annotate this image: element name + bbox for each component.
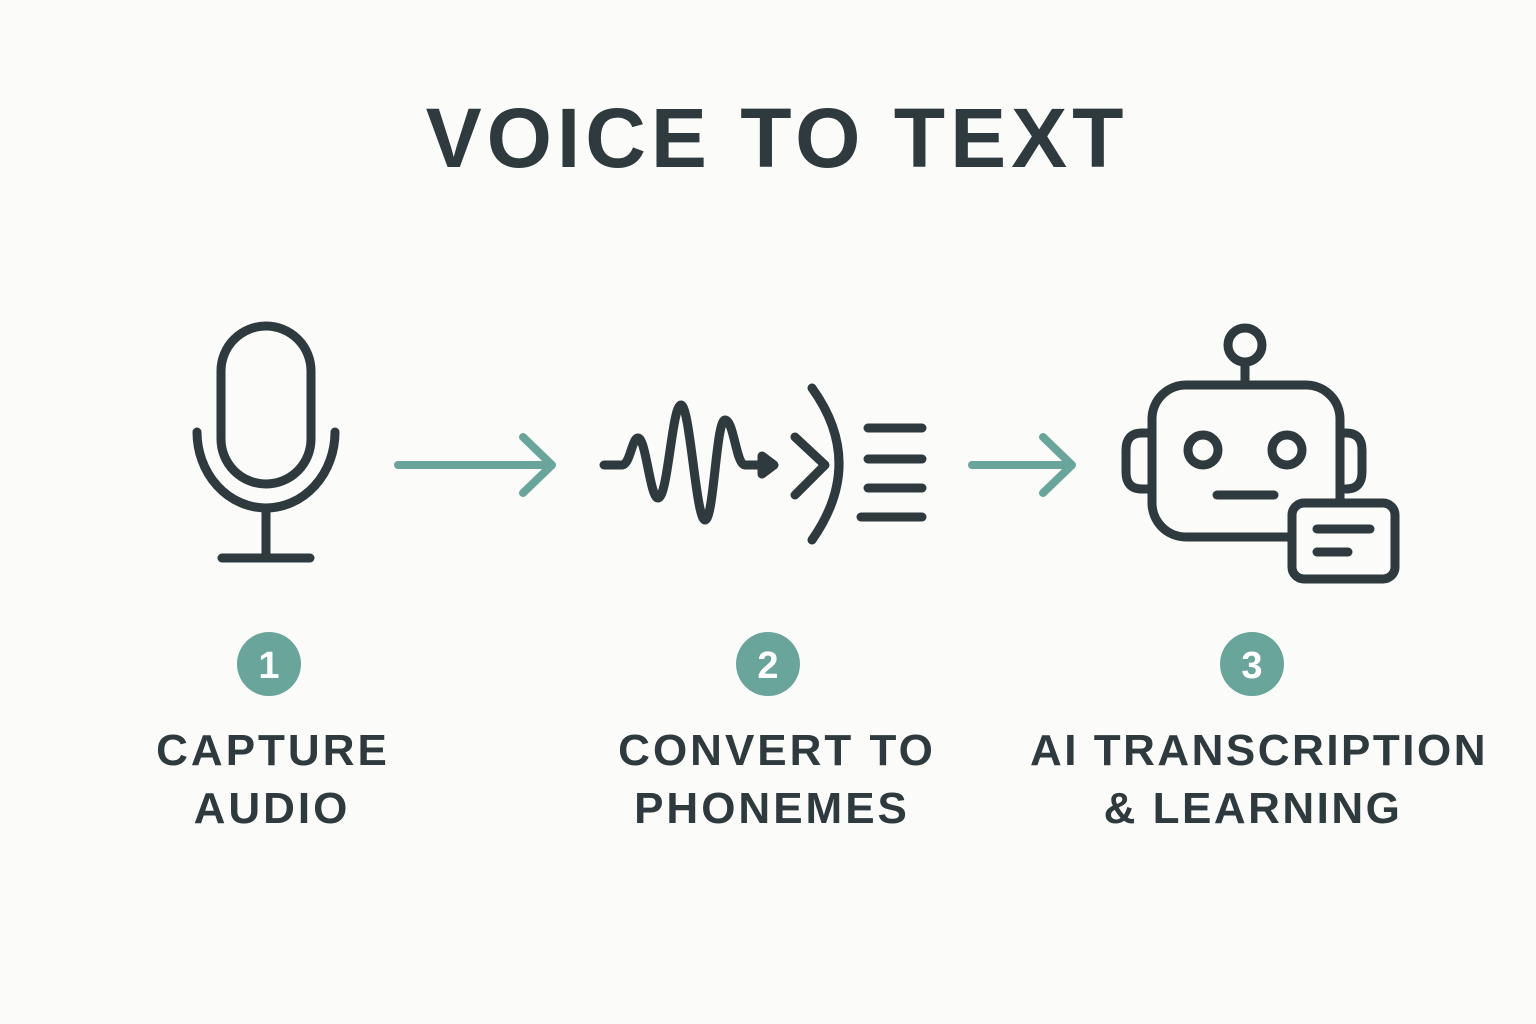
label step 1: AUDIO — [194, 784, 350, 833]
step 1 badge — [237, 632, 301, 696]
arrow 1 — [398, 437, 552, 493]
label step 3 — [1030, 726, 1488, 833]
step 2 badge: 2 — [757, 645, 779, 687]
step 3 badge: 3 — [1241, 645, 1263, 687]
step 2 badge — [736, 632, 800, 696]
icon: microphone — [197, 326, 335, 558]
label step 1 — [156, 726, 390, 833]
label step 2: CONVERT TO — [618, 726, 936, 775]
title: VOICE TO TEXT — [426, 91, 1128, 185]
label step 3: AI TRANSCRIPTION — [1030, 726, 1488, 775]
step 1 badge: 1 — [258, 645, 280, 687]
label step 2: PHONEMES — [634, 784, 910, 833]
arrow 2 — [972, 437, 1072, 493]
label step 3: & LEARNING — [1104, 784, 1402, 833]
step 3 badge — [1220, 632, 1284, 696]
label step 2 — [618, 726, 936, 833]
icon: waveform to phonemes — [604, 388, 922, 540]
label step 1: CAPTURE — [156, 726, 390, 775]
icon: robot with text bubble — [1126, 328, 1395, 579]
